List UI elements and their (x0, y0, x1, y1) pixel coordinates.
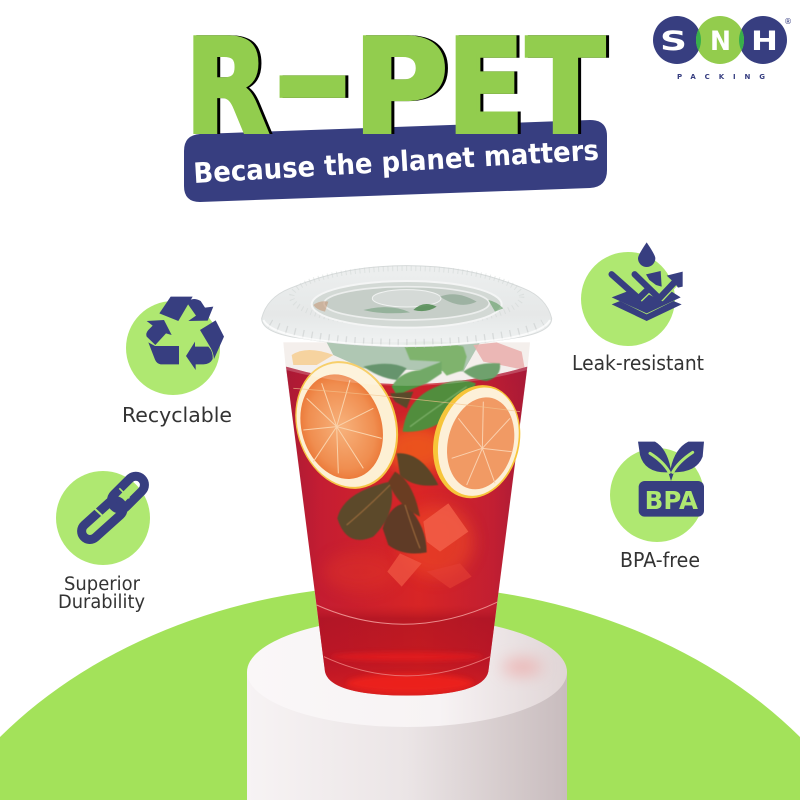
title: R-PET: - (272, 4, 353, 155)
logo: SNH Packing: PACKING (677, 73, 765, 81)
title: R-PET: R (188, 13, 272, 163)
label: Durability (58, 592, 145, 613)
lemon right (421, 376, 532, 508)
title: R-PET: E (447, 11, 524, 163)
title: R-PET: R (185, 13, 269, 163)
logo: SNH Packing (653, 16, 792, 81)
contents above the liquid (292, 350, 333, 365)
wall tint (283, 342, 530, 386)
title: R-PET: - (275, 4, 356, 155)
label: Superior (64, 574, 140, 595)
icon: recycle arrows (146, 297, 224, 370)
background green arc (0, 585, 800, 800)
icon circle (56, 471, 150, 565)
title: R-PET: E (450, 11, 527, 163)
icon: leak layers (612, 242, 683, 321)
feature: Superior Durability (56, 471, 150, 613)
pedestal (247, 617, 567, 800)
feature: Leak-resistant (572, 242, 704, 375)
lid (262, 266, 552, 347)
ice cubes (423, 503, 468, 552)
icon circle (581, 252, 675, 346)
label: BPA-free (620, 548, 700, 572)
logo: SNH Packing: S (660, 26, 687, 57)
icon circle (610, 448, 704, 542)
label (58, 574, 145, 613)
subtitle text: Because the planet matters (193, 134, 600, 190)
liquid (283, 365, 530, 698)
feature: Recyclable (122, 297, 232, 427)
icon: chain links (78, 473, 148, 543)
cup shell (283, 342, 530, 696)
mint upper (363, 341, 500, 432)
title: R-PET: P (353, 11, 448, 163)
subtitle banner (184, 120, 607, 202)
logo: SNH Packing: ® (784, 17, 792, 26)
logo: SNH Packing: H (751, 26, 778, 57)
icon: BPA sprout: BPA (645, 486, 698, 515)
title: R-PET: P (356, 11, 451, 163)
base highlights (330, 653, 483, 661)
lemon left (280, 348, 413, 502)
title: R-PET: T (526, 13, 605, 164)
cup with drink (262, 266, 552, 698)
mint lower dark (337, 453, 438, 554)
icon circle (126, 301, 220, 395)
title: R-PET: T (529, 13, 608, 164)
label: Recyclable (122, 403, 232, 427)
title: R-PET (185, 4, 608, 164)
logo: SNH Packing: N (710, 26, 731, 57)
feature: BPA-free (610, 442, 704, 572)
label: Leak-resistant (572, 351, 704, 375)
